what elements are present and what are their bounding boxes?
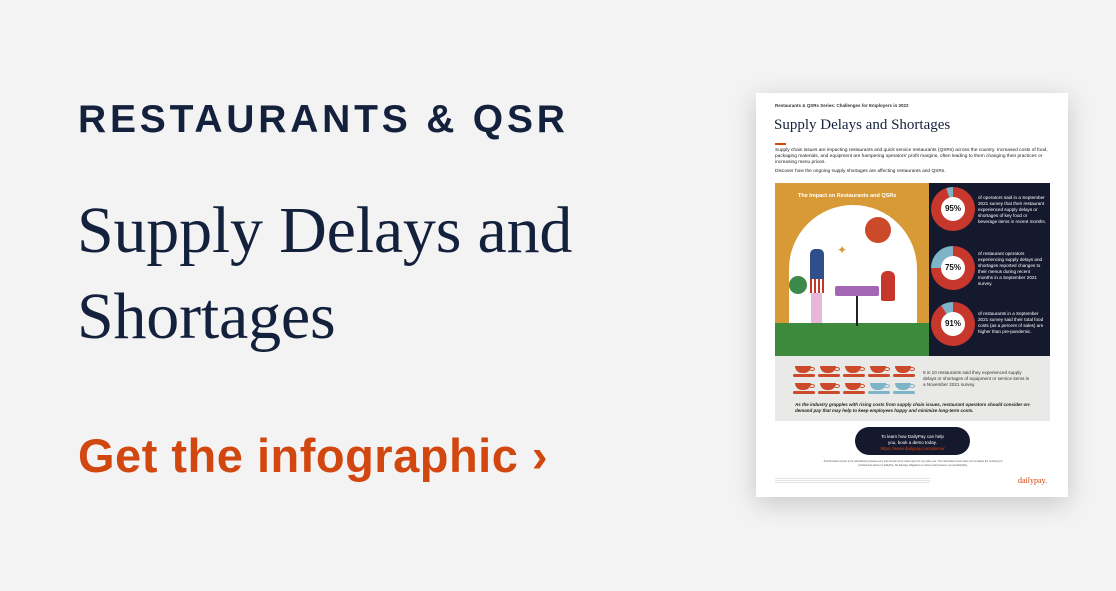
illustration panel xyxy=(775,183,929,356)
call to action link: Get the infographic › xyxy=(78,429,548,482)
title: Shortages xyxy=(77,280,336,353)
stats panel: 91% xyxy=(945,319,961,328)
eyebrow heading: RESTAURANTS & QSR xyxy=(78,98,569,141)
cups panel: 8 in 10 restaurants said they experienced supply delays or shortages of equipment or service items in a November 2021 survey. xyxy=(923,370,1029,387)
doc intro paragraph xyxy=(775,148,1048,174)
doc series header: Restaurants & QSRs Series: Challenges for Employers in 2022 xyxy=(775,103,909,108)
demo button: To learn how DailyPay can help xyxy=(881,434,944,439)
stats panel: of restaurants in a September 2021 survey said their total food costs (as a percent of sales) are higher than pre-pandemic. xyxy=(978,311,1043,334)
doc intro paragraph: Discover how the ongoing supply shortages are affecting restaurants and QSRs. xyxy=(775,169,946,174)
cups icons xyxy=(793,366,915,394)
dailypay logo: dailypay. xyxy=(1018,476,1047,485)
doc title: Supply Delays and Shortages xyxy=(774,117,950,133)
cups panel: As the industry grapples with rising costs from supply chain issues, restaurant operators should consider on-demand pay that may help to keep employees happy and minimize long-term costs. xyxy=(795,402,1031,413)
stat 91% xyxy=(931,302,975,346)
stat 75% xyxy=(931,246,975,290)
title xyxy=(77,194,572,353)
disclaimer: All information herein is for educational purposes only and should not be relied upon for any other use. The information herein does not constitute the rendering of professional advice by DailyPay. No fiduciary obligations or duties exist between you and DailyPay. xyxy=(824,460,1002,466)
stats panel: of restaurant operators experiencing supply delays and shortages reported changes to their menus during recent months in a September 2021 survey. xyxy=(978,251,1042,286)
demo button: you, book a demo today. xyxy=(888,440,937,445)
doc intro paragraph: Supply chain issues are impacting restaurants and quick service restaurants (QSRs) across the country. Increased costs of food, packaging materials, and equipment are hampering operators' profit margins, often leading to them changing their practices or increasing menu prices. xyxy=(775,148,1048,165)
demo button xyxy=(855,427,970,455)
infographic document preview xyxy=(756,93,1068,497)
stats panel: 95% xyxy=(945,204,961,213)
stat 95% xyxy=(931,187,975,231)
title: Supply Delays and xyxy=(77,194,572,267)
demo button: https://www.dailypay.com/demo/ xyxy=(881,446,944,451)
illustration panel: ✦ xyxy=(837,243,847,257)
stats panel: 75% xyxy=(945,263,961,272)
stats panel: of operators said in a September 2021 survey that their restaurant experienced supply delays or shortages of key food or beverage items in recent months. xyxy=(978,195,1046,224)
stats panel xyxy=(929,183,1050,356)
illustration panel: The Impact on Restaurants and QSRs xyxy=(798,193,896,199)
cups panel xyxy=(775,356,1050,421)
